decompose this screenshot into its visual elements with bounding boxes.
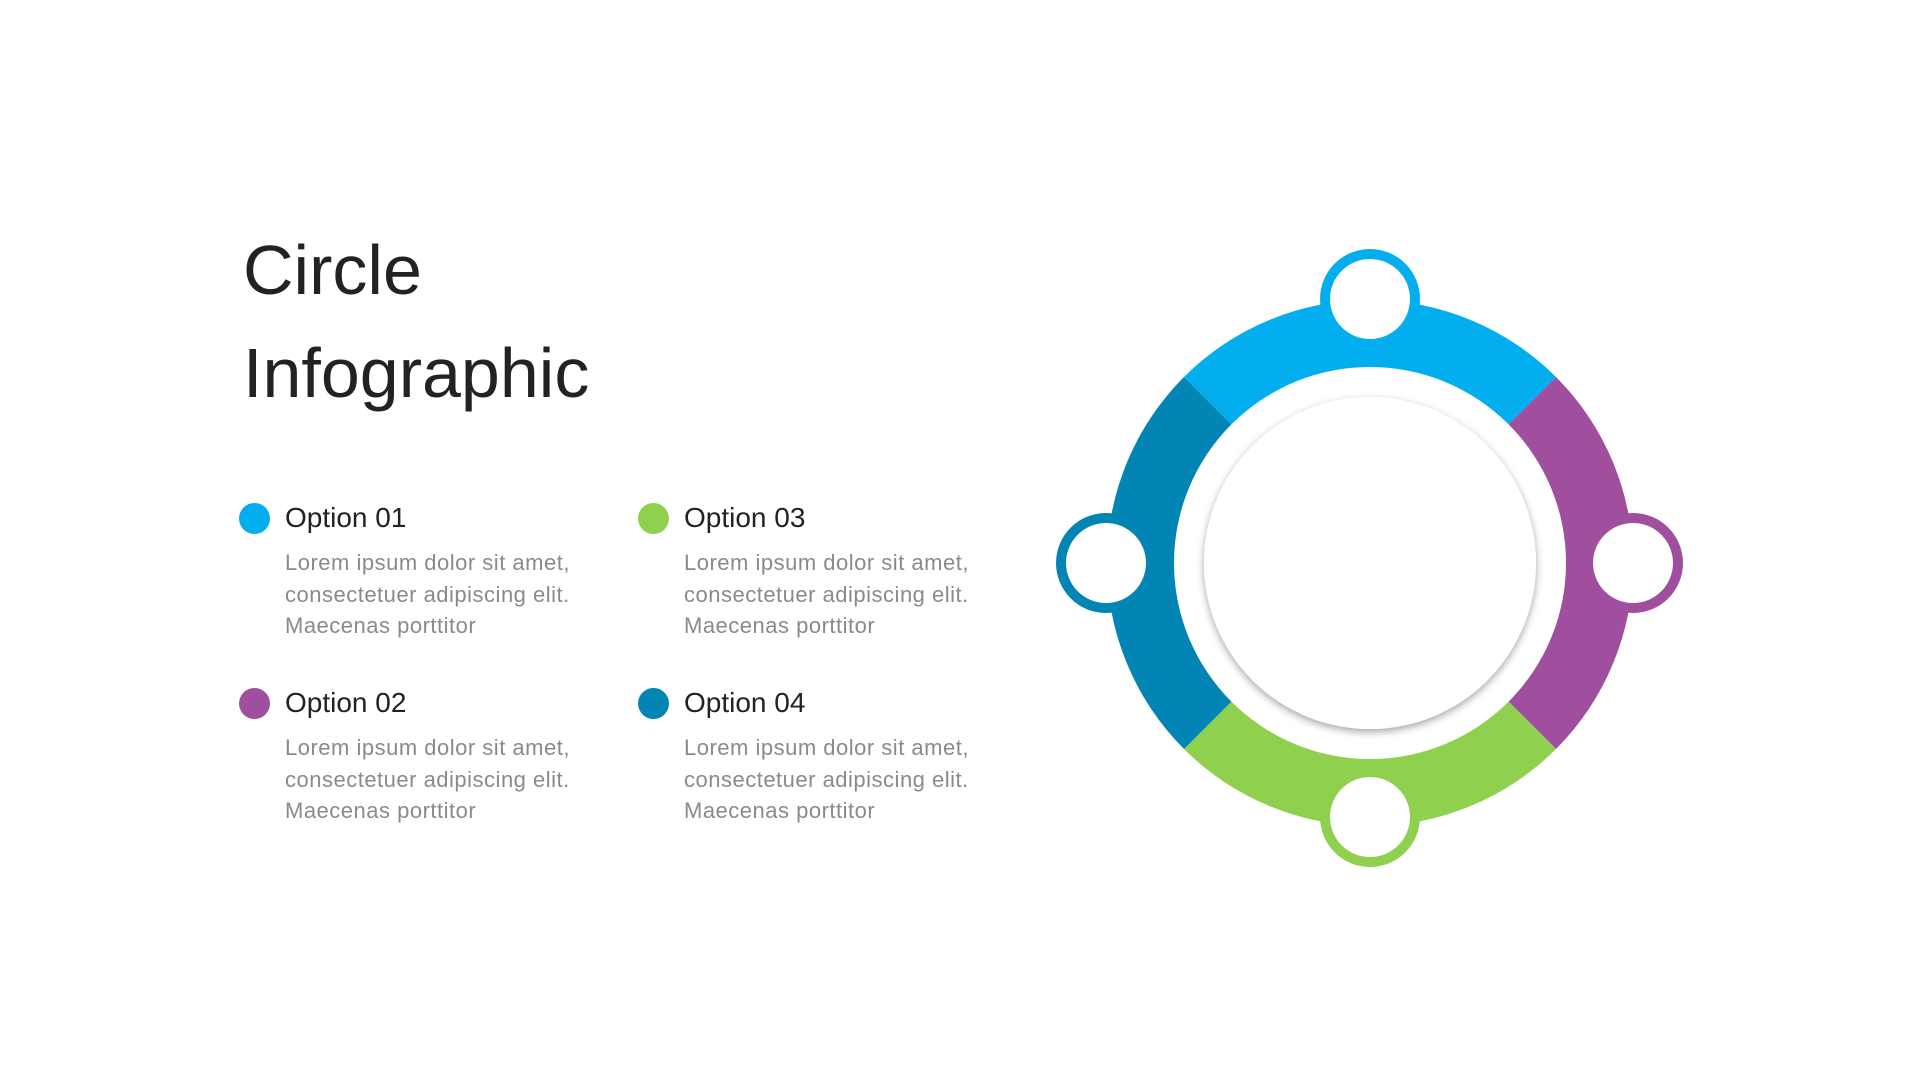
text: Maecenas porttitor bbox=[684, 798, 875, 823]
text: Lorem ipsum dolor sit amet, bbox=[684, 550, 969, 575]
icon: green dot bbox=[638, 503, 669, 534]
icon: dark blue dot bbox=[638, 688, 669, 719]
label: Option 03 bbox=[684, 502, 805, 533]
segment: top cyan bbox=[1184, 300, 1556, 424]
label: Option 01 bbox=[285, 502, 406, 533]
badge: top bbox=[1320, 249, 1420, 349]
title bbox=[243, 231, 589, 412]
text: Maecenas porttitor bbox=[285, 613, 476, 638]
option 03 bbox=[638, 502, 969, 638]
segment: bottom green bbox=[1184, 702, 1556, 826]
segment: left dark blue bbox=[1107, 377, 1231, 749]
option 01 bbox=[239, 502, 570, 638]
option 02 bbox=[239, 687, 570, 823]
icon: purple dot bbox=[239, 688, 270, 719]
text: Lorem ipsum dolor sit amet, bbox=[285, 550, 570, 575]
text: Maecenas porttitor bbox=[684, 613, 875, 638]
text: consectetuer adipiscing elit. bbox=[684, 582, 969, 606]
text: Lorem ipsum dolor sit amet, bbox=[285, 735, 570, 760]
text: consectetuer adipiscing elit. bbox=[684, 766, 969, 792]
text bbox=[684, 735, 969, 823]
title: Circle bbox=[243, 231, 422, 309]
text: Maecenas porttitor bbox=[285, 798, 476, 823]
badge: right bbox=[1583, 513, 1683, 613]
label: Option 04 bbox=[684, 687, 805, 718]
badge: left bbox=[1056, 513, 1156, 613]
label: Option 02 bbox=[285, 687, 406, 718]
text: consectetuer adipiscing elit. bbox=[285, 582, 570, 606]
text bbox=[684, 550, 969, 638]
center circle bbox=[1204, 397, 1536, 729]
text bbox=[285, 735, 570, 823]
text: Lorem ipsum dolor sit amet, bbox=[684, 735, 969, 760]
text: consectetuer adipiscing elit. bbox=[285, 766, 570, 792]
title: Infographic bbox=[243, 334, 589, 412]
option 04 bbox=[638, 687, 969, 823]
segment: right purple bbox=[1509, 377, 1633, 749]
icon: cyan dot bbox=[239, 503, 270, 534]
badge: bottom bbox=[1320, 767, 1420, 867]
text bbox=[285, 550, 570, 638]
